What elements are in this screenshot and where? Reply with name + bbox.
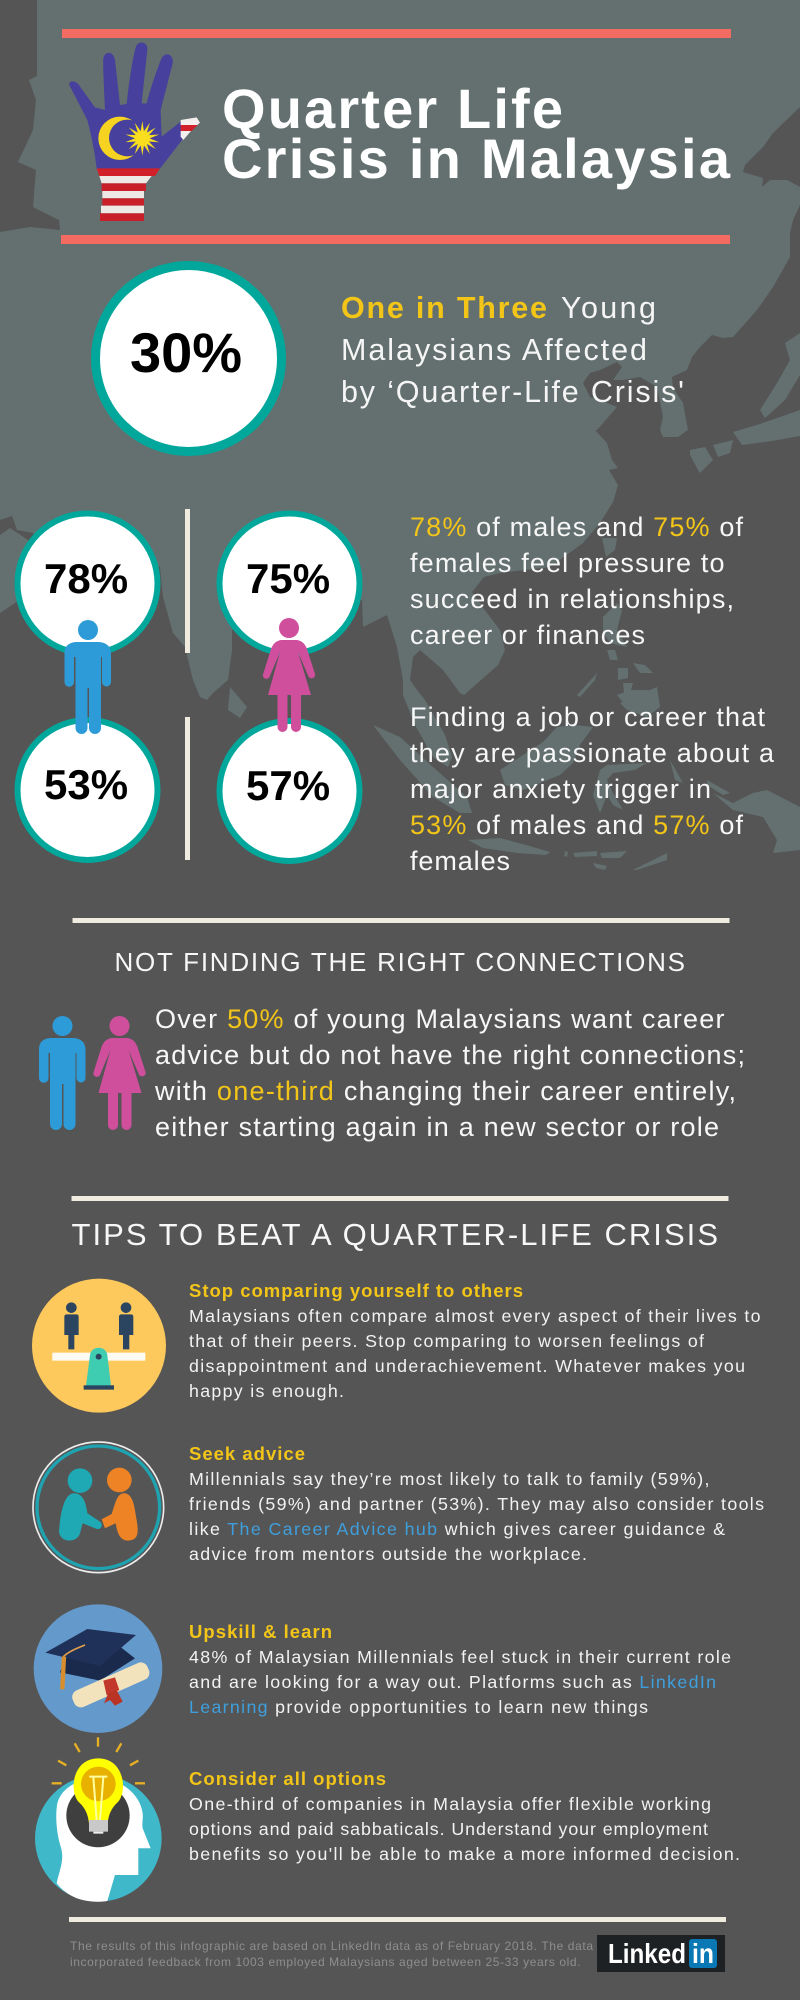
tip 1: stop comparing: that of their peers. Stop comparing to worsen feelings of — [189, 1331, 704, 1351]
footer source note: incorporated feedback from 1003 employed Malaysians aged between 25-33 years old. — [70, 1955, 580, 1969]
title — [222, 77, 731, 190]
tip 1: stop comparing: disappointment and underachievement. Whatever makes you — [189, 1356, 745, 1376]
stat circle: 53% males — [18, 720, 158, 860]
text: pressure statistics: females feel pressure to — [410, 548, 724, 578]
horizontal divider — [72, 1196, 728, 1201]
LinkedIn logo: Linked — [608, 1938, 686, 1969]
text: anxiety trigger statistics: Finding a job or career that — [410, 702, 765, 732]
text: anxiety trigger statistics: they are passionate about a — [410, 738, 775, 768]
text: pressure statistics — [410, 512, 743, 650]
text: anxiety trigger statistics: 53% of males and 57% of — [410, 810, 743, 840]
text: one in three: by ‘Quarter-Life Crisis' — [341, 375, 684, 409]
text: pressure statistics: career or finances — [410, 620, 645, 650]
tip 2: seek advice: Seek advice — [189, 1443, 305, 1464]
top red divider — [62, 29, 731, 38]
text: pressure statistics: 78% of males and 75% of — [410, 512, 743, 542]
text: anxiety trigger statistics: females — [410, 846, 510, 876]
tip 3: upskill and learn — [189, 1621, 731, 1717]
title: Crisis in Malaysia — [222, 127, 731, 190]
tip 1: stop comparing: Stop comparing yourself to others — [189, 1280, 523, 1301]
stat circle: 57% females — [220, 721, 360, 861]
tip 2: seek advice: friends (59%) and partner (53%). They may also consider tools — [189, 1494, 764, 1514]
text: career connections: advice but do not have the right connections; — [155, 1040, 745, 1070]
stat circle: 30% — [96, 266, 282, 452]
text: one in three — [341, 291, 684, 409]
tip 4: consider all options — [189, 1768, 740, 1864]
tip 1: stop comparing: Malaysians often compare almost every aspect of their lives to — [189, 1306, 761, 1326]
horizontal divider — [69, 1917, 726, 1922]
stat circle: 78% males — [18, 514, 158, 654]
stat circle: 75% females: 75% — [246, 555, 330, 602]
text: one in three: One in Three — [341, 291, 547, 325]
tip 3: upskill and learn: Upskill & learn — [189, 1621, 332, 1642]
LinkedIn logo — [597, 1935, 725, 1972]
icon: graduation cap and diploma — [34, 1604, 162, 1733]
text: career connections: with one-third changing their career entirely, — [154, 1076, 736, 1106]
tip 4: consider all options: benefits so you'll be able to make a more informed decision. — [189, 1844, 740, 1864]
text: career connections: Over 50% of young Malaysians want career — [155, 1004, 724, 1034]
tip 2: seek advice: like The Career Advice hub which gives career guidance & — [189, 1519, 725, 1539]
vertical divider upper — [185, 509, 190, 653]
icon: head with light bulb — [35, 1737, 162, 1902]
stat circle: 78% males: 78% — [44, 555, 128, 602]
icon: male and female pair — [39, 1016, 146, 1130]
tip 4: consider all options: options and paid sabbaticals. Understand your employment — [189, 1819, 708, 1839]
icon: balance scale with two people — [32, 1279, 166, 1413]
tip 2: seek advice: advice from mentors outside the workplace. — [189, 1544, 587, 1564]
text: one in three: Malaysians Affected — [341, 333, 647, 367]
tip 3: upskill and learn: and are looking for a way out. Platforms such as LinkedIn — [189, 1672, 716, 1692]
stat circle: 57% females: 57% — [246, 762, 330, 809]
footer source note: The results of this infographic are based on LinkedIn data as of February 2018. The data — [70, 1939, 593, 1953]
text: anxiety trigger statistics — [410, 702, 775, 876]
text: anxiety trigger statistics: major anxiety trigger in — [410, 774, 711, 804]
stat circle: 53% males: 53% — [44, 761, 128, 808]
icon: two people shaking hands — [33, 1442, 164, 1573]
vertical divider lower — [185, 717, 190, 860]
horizontal divider — [72, 918, 730, 923]
tip 3: upskill and learn: 48% of Malaysian Millennials feel stuck in their current role — [189, 1647, 731, 1667]
LinkedIn logo: in — [692, 1938, 714, 1969]
tip 2: seek advice — [189, 1443, 764, 1564]
bottom red divider — [61, 235, 730, 244]
text: career connections: either starting again in a new sector or role — [155, 1112, 719, 1142]
text: one in three: Young — [561, 291, 656, 325]
heading: not finding the right connections: NOT FINDING THE RIGHT CONNECTIONS — [114, 947, 685, 977]
text: career connections — [154, 1004, 745, 1142]
icon: female figure — [263, 618, 315, 732]
icon: hand painted with Malaysian flag — [69, 43, 200, 221]
icon: male figure — [64, 620, 111, 734]
stat circle: 75% females — [220, 514, 360, 654]
tip 1: stop comparing — [189, 1280, 761, 1401]
title: Quarter Life — [222, 77, 563, 140]
tip 2: seek advice: Millennials say they’re most likely to talk to family (59%), — [189, 1469, 710, 1489]
text: pressure statistics: succeed in relationships, — [410, 584, 734, 614]
tip 4: consider all options: One-third of companies in Malaysia offer flexible working — [189, 1794, 711, 1814]
tip 3: upskill and learn: Learning provide opportunities to learn new things — [189, 1697, 648, 1717]
heading: tips: TIPS TO BEAT A QUARTER-LIFE CRISIS — [72, 1217, 718, 1252]
tip 1: stop comparing: happy is enough. — [189, 1381, 344, 1401]
stat circle: 30%: 30% — [130, 321, 242, 384]
footer source note — [70, 1939, 593, 1969]
tip 4: consider all options: Consider all options — [189, 1768, 386, 1789]
